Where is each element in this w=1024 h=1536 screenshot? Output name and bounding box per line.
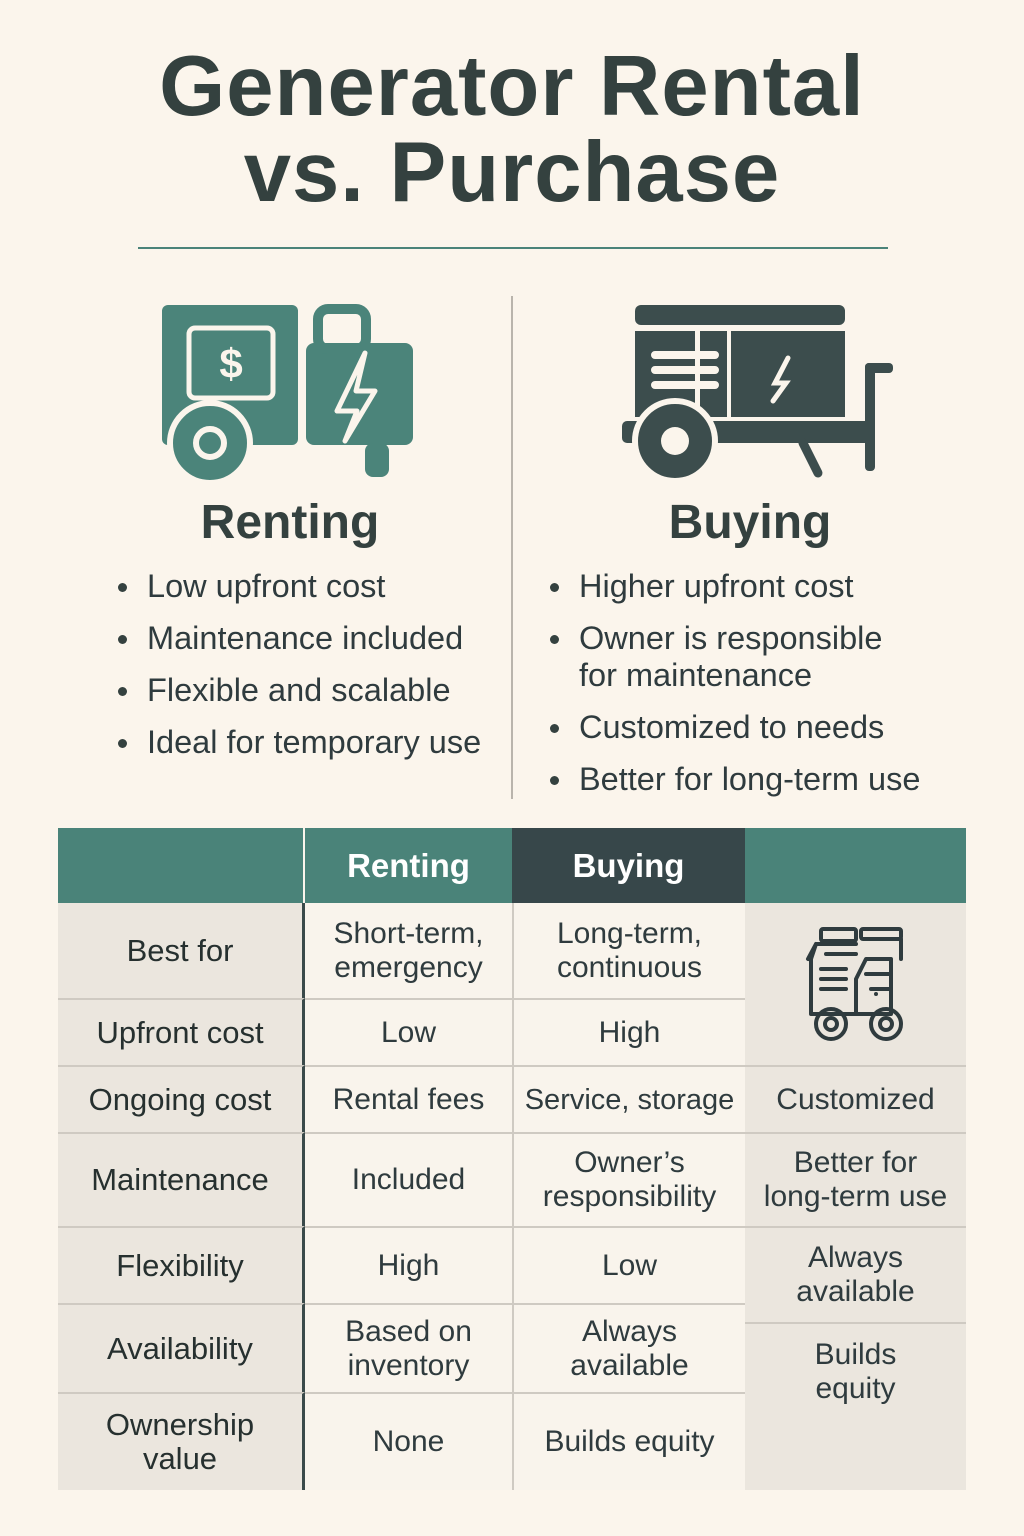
buying column: responsibility (543, 1180, 716, 1213)
extra column: long-term use (764, 1180, 947, 1213)
buying column: continuous (557, 950, 702, 984)
row labels: Availability (107, 1330, 253, 1366)
list: renting points (118, 568, 481, 760)
list: buying points: Customized to needs (579, 709, 884, 745)
vertical divider (511, 296, 513, 799)
buying column: Always (582, 1314, 677, 1348)
extra column: Builds (815, 1338, 896, 1371)
list: buying points: Better for long-term use (579, 761, 920, 797)
extra column: equity (815, 1372, 896, 1405)
buying column: Owner’s (574, 1146, 685, 1179)
list: buying points: Higher upfront cost (579, 568, 854, 604)
list: buying points: Owner is responsible (579, 620, 882, 656)
list: renting points: Ideal for temporary use (147, 724, 481, 760)
list: renting points: Maintenance included (147, 620, 463, 656)
icon: outline generator (745, 903, 966, 1065)
buying column: available (570, 1348, 689, 1382)
list: renting points: Flexible and scalable (147, 672, 451, 708)
icon: rental generator (162, 304, 413, 480)
renting column: Low (381, 1016, 436, 1048)
row labels: Best for (127, 932, 233, 968)
comparison table (58, 828, 966, 1490)
extra column: Always (808, 1241, 903, 1274)
title (159, 39, 865, 220)
buying column: Low (602, 1248, 657, 1282)
renting column: inventory (348, 1348, 469, 1382)
renting column: None (373, 1425, 444, 1458)
buying column: High (599, 1016, 660, 1048)
renting column: Included (352, 1163, 465, 1196)
icon: purchased generator (622, 305, 893, 478)
title: vs. Purchase (244, 125, 780, 220)
renting column: emergency (334, 950, 483, 984)
icon: rental generator: $ (219, 340, 243, 387)
extra column (745, 903, 966, 1490)
header: Renting: Renting (347, 846, 470, 884)
row labels: value (143, 1441, 217, 1476)
extra column: Customized (776, 1082, 935, 1116)
header: Buying (512, 828, 745, 903)
list: renting points: Low upfront cost (147, 568, 385, 604)
buying column: Long-term, (557, 916, 702, 950)
renting column: Rental fees (333, 1082, 484, 1116)
extra column: Better for (794, 1146, 917, 1179)
renting column: Based on (345, 1314, 472, 1348)
buying column (512, 903, 745, 1490)
title: Generator Rental (159, 39, 865, 134)
header: Buying: Buying (573, 846, 684, 884)
row labels: Maintenance (91, 1162, 269, 1197)
renting column: Short-term, (333, 916, 484, 950)
row labels: Upfront cost (96, 1014, 264, 1050)
row labels: Ongoing cost (89, 1082, 271, 1116)
row labels: Flexibility (116, 1248, 244, 1282)
buying column: Service, storage (525, 1084, 734, 1116)
heading: Buying: Buying (669, 496, 831, 549)
renting column (305, 916, 512, 1458)
list: buying points (550, 568, 920, 797)
extra column: available (796, 1275, 915, 1308)
renting column: High (378, 1248, 439, 1282)
row labels: Ownership (106, 1407, 254, 1442)
list: buying points: for maintenance (579, 657, 812, 693)
table header (58, 828, 966, 903)
heading: Renting: Renting (201, 496, 379, 549)
divider line (138, 247, 888, 249)
buying column: Builds equity (544, 1425, 715, 1458)
row labels (58, 903, 305, 1490)
